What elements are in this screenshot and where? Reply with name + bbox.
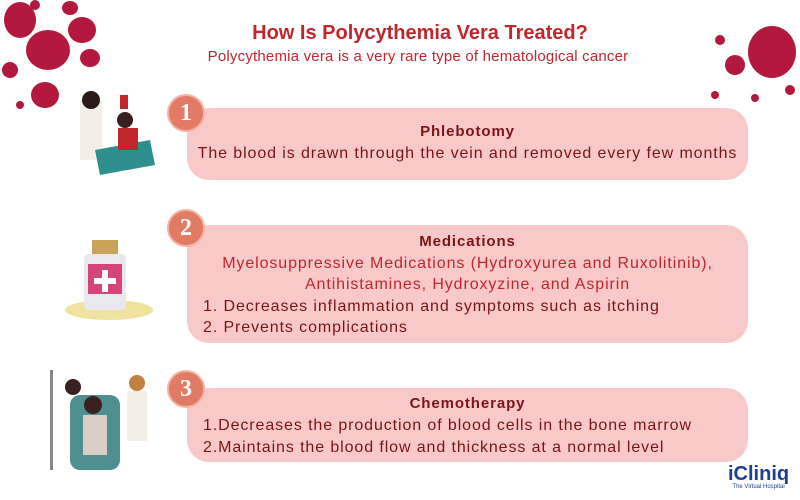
decorative blood cells top-right <box>711 26 796 102</box>
panel: chemotherapy: 1.Decreases the production of blood cells in the bone marrow <box>203 417 692 434</box>
logo: iCliniq <box>728 463 789 485</box>
panel: medications <box>187 225 748 343</box>
number 3: 3 <box>180 376 192 402</box>
illustration: chemotherapy <box>50 370 147 470</box>
number 3 <box>167 370 205 408</box>
illustration: medicine bottle <box>65 240 153 320</box>
panel: phlebotomy <box>187 108 748 180</box>
number 1: 1 <box>180 100 192 126</box>
panel: medications: Myelosuppressive Medications (Hydroxyurea and Ruxolitinib), <box>222 254 713 272</box>
number 2 <box>167 209 205 247</box>
panel: chemotherapy: Chemotherapy <box>410 395 525 412</box>
logo: The Virtual Hospital <box>732 484 785 490</box>
title: How Is Polycythemia Vera Treated? <box>252 22 588 44</box>
decorative blood cells top-left <box>2 0 100 109</box>
panel: chemotherapy: 2.Maintains the blood flow and thickness at a normal level <box>203 439 664 456</box>
illustration: phlebotomy <box>80 91 155 175</box>
number 2: 2 <box>180 215 192 241</box>
number 1 <box>167 94 205 132</box>
panel: medications: 1. Decreases inflammation and symptoms such as itching <box>203 298 660 314</box>
panel: phlebotomy: The blood is drawn through the vein and removed every few months <box>198 145 737 162</box>
panel: medications: Medications <box>419 233 516 250</box>
panel: phlebotomy: Phlebotomy <box>420 123 515 140</box>
subtitle: Polycythemia vera is a very rare type of hematological cancer <box>208 48 628 65</box>
panel: medications: Antihistamines, Hydroxyzine, and Aspirin <box>305 276 630 293</box>
panel: medications: 2. Prevents complications <box>203 319 408 336</box>
panel: chemotherapy <box>187 388 748 462</box>
